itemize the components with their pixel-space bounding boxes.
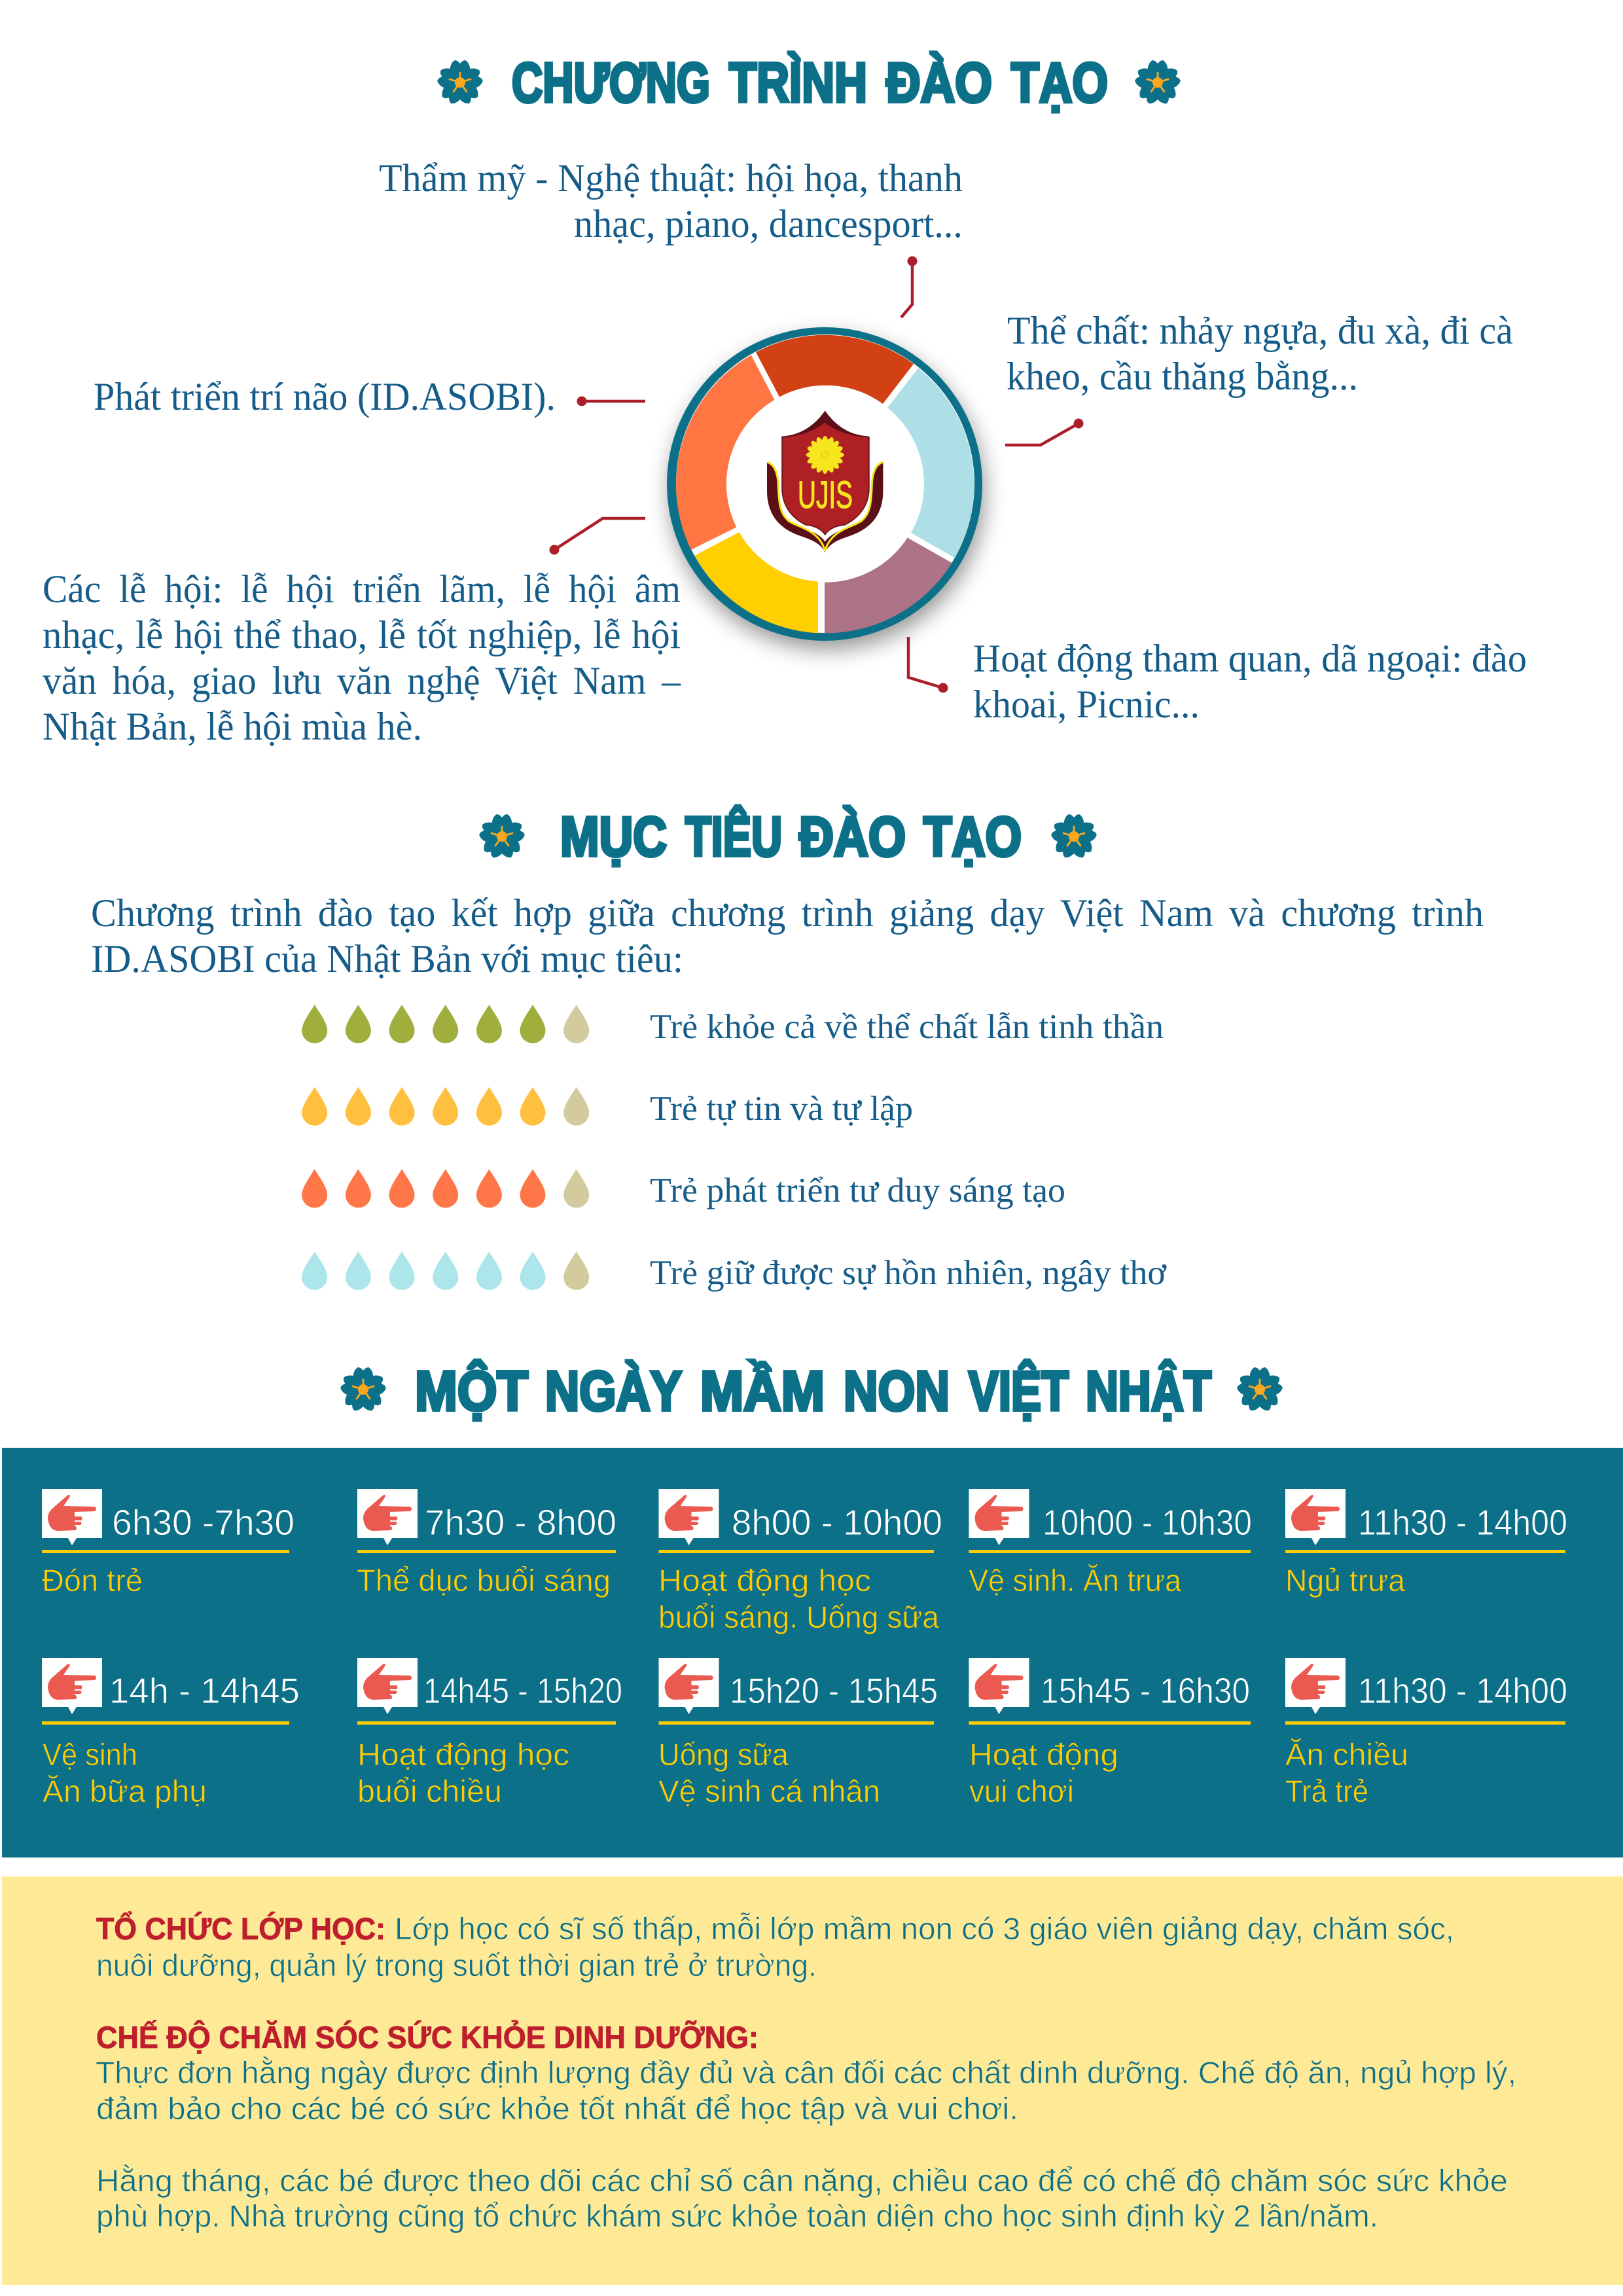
callout: Thẩm mỹ - Nghệ thuật: nhạc, piano, dancesport... <box>574 202 963 245</box>
rating row 4 <box>302 1251 1167 1292</box>
schedule item 11h30: 11h30 - 14h00 <box>1358 1502 1567 1543</box>
text block: Tổ chức lớp học <box>96 1911 1454 1982</box>
text block: Chế độ chăm sóc: Thực đơn hằng ngày được định lượng đầy đủ và cân đối các chất dinh dưỡng. Chế độ ăn, ngủ hợp lý, <box>96 2055 1516 2090</box>
schedule item 6h30: 6h30 -7h30 <box>112 1502 294 1543</box>
title: Mục tiêu đào tạo <box>478 805 1098 868</box>
heading text: TẠO <box>1011 52 1108 114</box>
text block: Chế độ chăm sóc: đảm bảo cho các bé có sức khỏe tốt nhất để học tập và vui chơi. <box>96 2091 1018 2126</box>
label: Trẻ khỏe cả về thể chất lẫn tinh thần <box>650 1008 1164 1046</box>
schedule item 15h45 <box>969 1658 1251 1808</box>
text block: Tổ chức lớp học: nuôi dưỡng, quản lý trong suốt thời gian trẻ ở trường. <box>96 1948 817 1982</box>
schedule item 15h45: Hoạt động <box>969 1737 1118 1772</box>
drops <box>302 1251 589 1290</box>
schedule item afternoon 11h30 <box>1285 1658 1567 1808</box>
text block: goal intro: ID.ASOBI của Nhật Bản với mục tiêu: <box>91 937 683 980</box>
text block: Hằng tháng: Hằng tháng, các bé được theo dõi các chỉ số cân nặng, chiều cao để có chế độ chăm sóc sức khỏe <box>96 2163 1508 2198</box>
callout: Các lễ hội: Nhật Bản, lễ hội mùa hè. <box>43 705 422 748</box>
schedule item 14h45: buổi chiều <box>357 1774 502 1808</box>
text block: goal intro: Chương trình đào tạo kết hợp giữa chương trình giảng dạy Việt Nam và chương trình <box>91 891 1484 935</box>
schedule item 8h00 <box>658 1489 942 1634</box>
icon: flower right <box>1236 1367 1284 1414</box>
rating row 2 <box>302 1087 913 1128</box>
connector lines <box>550 257 1084 692</box>
donut chart with logo <box>667 327 982 641</box>
icon: flower right <box>1050 814 1098 861</box>
segment: top <box>756 335 914 404</box>
heading: Tổ chức lớp học: TỔ CHỨC LỚP HỌC: <box>96 1911 385 1946</box>
callout: Hoạt động tham quan: khoai, Picnic... <box>973 683 1200 726</box>
heading text <box>415 1360 1211 1423</box>
heading text: VIỆT <box>969 1360 1069 1423</box>
heading: Chế độ chăm sóc sức khỏe dinh dưỡng: CHẾ ĐỘ CHĂM SÓC SỨC KHỎE DINH DƯỠNG: <box>96 2020 758 2054</box>
schedule item 14h: Vệ sinh <box>43 1737 137 1772</box>
panel: daily schedule <box>2 1448 1623 1857</box>
schedule item afternoon 11h30: 11h30 - 14h00 <box>1358 1670 1567 1711</box>
callout: Thẩm mỹ - Nghệ thuật: Thẩm mỹ - Nghệ thuật: hội họa, thanh <box>379 156 963 200</box>
schedule item 15h20: Vệ sinh cá nhân <box>658 1774 880 1808</box>
callout: Các lễ hội: nhạc, lễ hội thể thao, lễ tốt nghiệp, lễ hội <box>43 613 681 656</box>
schedule item 6h30: Đón trẻ <box>42 1563 143 1598</box>
heading text: MẦM <box>700 1360 825 1423</box>
rating row 3 <box>302 1169 1065 1210</box>
heading text: TẠO <box>923 806 1022 868</box>
heading text: NGÀY <box>545 1360 682 1423</box>
icon: flower left <box>478 814 526 861</box>
drops <box>302 1087 589 1126</box>
label: Trẻ giữ được sự hồn nhiên, ngây thơ <box>650 1254 1167 1292</box>
text block: Chế độ chăm sóc <box>96 2020 1516 2126</box>
rating row 1 <box>302 1005 1164 1046</box>
schedule item 14h: 14h - 14h45 <box>109 1670 300 1711</box>
label: Trẻ phát triển tư duy sáng tạo <box>650 1172 1065 1210</box>
callout: Thẩm mỹ - Nghệ thuật <box>379 156 963 245</box>
heading text <box>560 805 1022 868</box>
heading text: TRÌNH <box>729 52 867 114</box>
schedule item 7h30: Thể dục buổi sáng <box>357 1563 611 1598</box>
callout: Hoạt động tham quan <box>973 637 1527 726</box>
heading text: CHƯƠNG <box>512 52 710 114</box>
schedule item 15h20: 15h20 - 15h45 <box>730 1670 938 1711</box>
drops <box>302 1169 589 1208</box>
title: Chương trình đào tạo <box>436 52 1182 114</box>
logo: UJIS shield: UJIS <box>798 474 853 516</box>
icon: flower right <box>1133 60 1182 107</box>
callout: Thể chất: kheo, cầu thăng bằng... <box>1007 355 1358 398</box>
icon: flower left <box>436 60 484 107</box>
schedule item 8h00: 8h00 - 10h00 <box>732 1502 942 1543</box>
schedule item 15h20 <box>658 1658 938 1808</box>
schedule item 6h30 <box>42 1489 294 1598</box>
schedule item 14h45: Hoạt động học <box>357 1737 569 1772</box>
schedule item 14h: Ăn bữa phụ <box>43 1774 207 1808</box>
schedule item 8h00: Hoạt động học <box>658 1563 871 1598</box>
text block: Tổ chức lớp học: Lớp học có sĩ số thấp, mỗi lớp mầm non có 3 giáo viên giảng dạy, chăm sóc, <box>395 1911 1454 1946</box>
schedule item 7h30: 7h30 - 8h00 <box>425 1502 616 1543</box>
schedule item 15h20: Uống sữa <box>658 1737 789 1772</box>
callout: Các lễ hội: văn hóa, giao lưu văn nghệ Việt Nam – <box>43 659 681 702</box>
heading text <box>512 52 1108 114</box>
callout: Thể chất <box>1007 309 1513 398</box>
callout: Các lễ hội <box>43 567 681 748</box>
text block: Hằng tháng: phù hợp. Nhà trường cũng tổ chức khám sức khỏe toàn diện cho học sinh định kỳ 2 lần/năm. <box>96 2198 1378 2233</box>
heading text: MỘT <box>415 1360 528 1423</box>
segment: right <box>887 368 974 558</box>
schedule item 14h45: 14h45 - 15h20 <box>423 1670 622 1711</box>
schedule item 8h00: buổi sáng. Uống sữa <box>658 1600 940 1634</box>
schedule item 15h45: vui chơi <box>969 1774 1074 1808</box>
heading text: ĐÀO <box>886 52 992 114</box>
schedule item 7h30 <box>357 1489 616 1598</box>
icon: flower left <box>339 1367 387 1414</box>
label: Trẻ tự tin và tự lập <box>650 1090 913 1128</box>
callout: Thể chất: Thể chất: nhảy ngựa, đu xà, đi cà <box>1007 309 1513 352</box>
schedule item 10h00 <box>969 1489 1252 1598</box>
schedule item 11h30: Ngủ trưa <box>1285 1563 1406 1598</box>
drops <box>302 1005 589 1043</box>
segment: lower right <box>825 538 952 633</box>
schedule item 14h45 <box>357 1658 622 1808</box>
schedule item 11h30 <box>1285 1489 1567 1598</box>
heading text: TIÊU <box>685 805 782 868</box>
callout: Hoạt động tham quan: Hoạt động tham quan, dã ngoại: đào <box>973 637 1527 680</box>
heading text: ĐÀO <box>799 806 906 868</box>
panel: class organisation and nutrition <box>2 1876 1623 2285</box>
segment: left <box>676 355 775 550</box>
heading text: MỤC <box>560 806 667 868</box>
schedule item 10h00: 10h00 - 10h30 <box>1043 1502 1252 1543</box>
text block: Hằng tháng <box>96 2163 1508 2233</box>
schedule item afternoon 11h30: Ăn chiều <box>1285 1737 1408 1772</box>
title: Một ngày mầm non Việt Nhật <box>339 1360 1284 1423</box>
text block: goal intro <box>91 891 1484 980</box>
logo: UJIS shield <box>767 411 883 552</box>
segment: lower left <box>695 532 818 633</box>
schedule item 10h00: Vệ sinh. Ăn trưa <box>969 1563 1182 1598</box>
schedule item 14h <box>42 1658 300 1808</box>
callout: Các lễ hội: Các lễ hội: lễ hội triển lãm, lễ hội âm <box>43 567 681 611</box>
callout: Phát triển trí não: Phát triển trí não (ID.ASOBI). <box>94 375 556 418</box>
schedule item 15h45: 15h45 - 16h30 <box>1041 1670 1250 1711</box>
heading text: NON <box>844 1360 950 1423</box>
schedule item afternoon 11h30: Trả trẻ <box>1285 1774 1368 1808</box>
heading text: NHẬT <box>1086 1360 1211 1423</box>
